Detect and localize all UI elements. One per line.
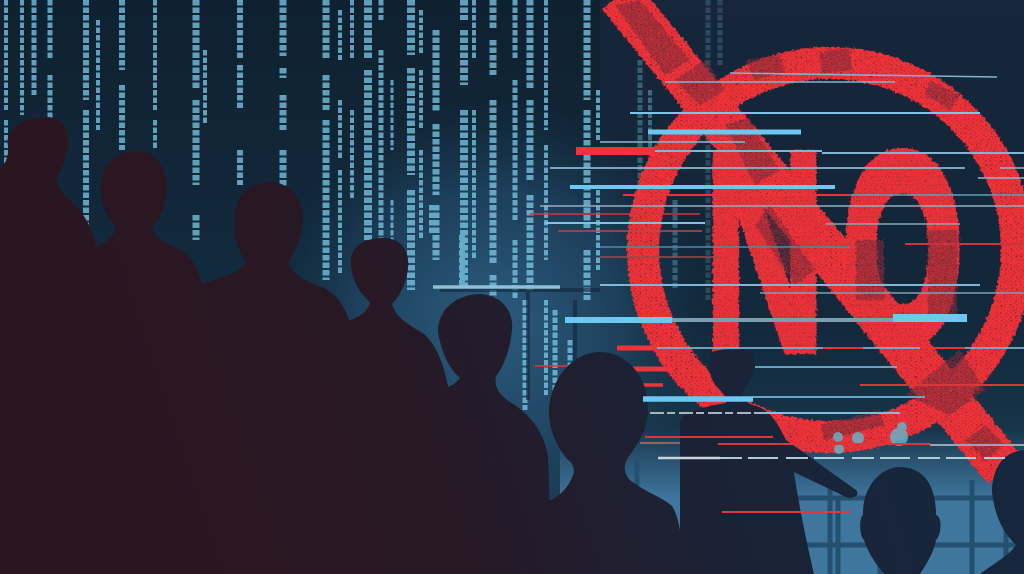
person 3 xyxy=(200,182,380,574)
glitch streaks behind crowd xyxy=(433,73,1024,385)
dark texture patches xyxy=(615,0,1005,460)
data wall: columns of code xyxy=(6,0,720,420)
person 9 xyxy=(980,450,1024,574)
person 5 xyxy=(438,294,552,574)
letter N: N xyxy=(704,92,825,411)
letter O: O xyxy=(844,104,961,395)
person 7 standing figure xyxy=(680,349,858,574)
ring xyxy=(643,63,1017,437)
person 6 xyxy=(520,352,684,574)
crowd silhouettes xyxy=(0,117,1024,574)
person 1 xyxy=(0,117,110,574)
diagonal strike xyxy=(619,0,1005,470)
person 4 xyxy=(345,238,480,574)
background grid panels xyxy=(440,290,1024,574)
cyan data blotches on the ring xyxy=(833,422,908,454)
person 2 xyxy=(90,151,230,574)
glitch streaks over crowd xyxy=(640,397,1024,512)
person 8 xyxy=(860,467,940,574)
crossed-out NO symbol xyxy=(615,0,1017,470)
